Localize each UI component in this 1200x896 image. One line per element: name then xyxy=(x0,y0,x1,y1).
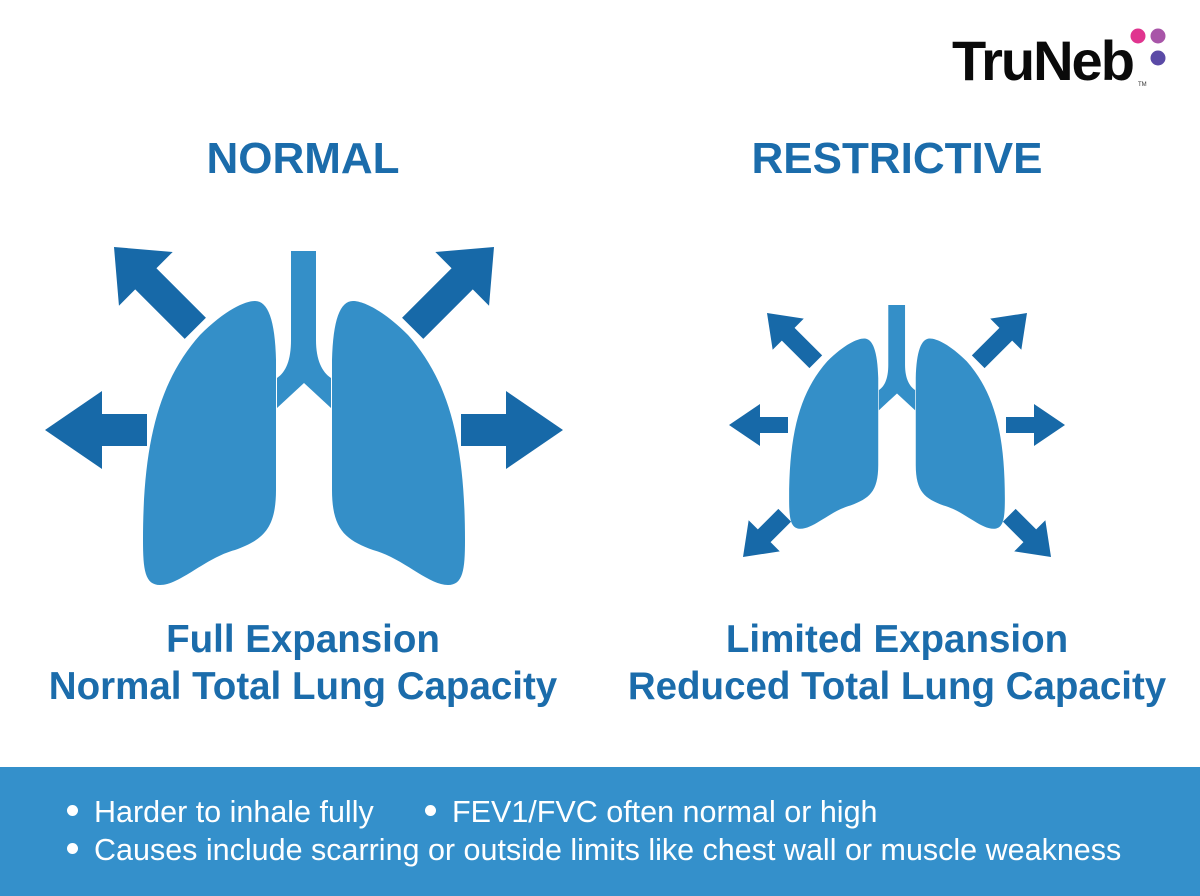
illustration: restrictive lungs with arrows xyxy=(729,305,1065,557)
bullet: causes: Causes include scarring or outside limits like chest wall or muscle weakness xyxy=(94,833,1121,867)
caption: normal: Full Expansion xyxy=(166,618,440,661)
caption: normal xyxy=(49,618,557,708)
caption: normal: Normal Total Lung Capacity xyxy=(49,665,557,708)
logo: TM xyxy=(1138,82,1147,88)
logo: TruNeb xyxy=(952,29,1133,92)
caption: restrictive: Limited Expansion xyxy=(726,618,1068,661)
caption: restrictive xyxy=(628,618,1166,708)
bullet: harder to inhale: Harder to inhale fully xyxy=(94,795,374,829)
illustration: normal lungs with arrows xyxy=(45,247,563,585)
bullet: FEV1/FVC: FEV1/FVC often normal or high xyxy=(452,795,878,829)
heading: normal: NORMAL xyxy=(206,134,400,183)
bottom band: key points xyxy=(0,767,1200,896)
heading: restrictive: RESTRICTIVE xyxy=(752,134,1042,183)
caption: restrictive: Reduced Total Lung Capacity xyxy=(628,665,1166,708)
